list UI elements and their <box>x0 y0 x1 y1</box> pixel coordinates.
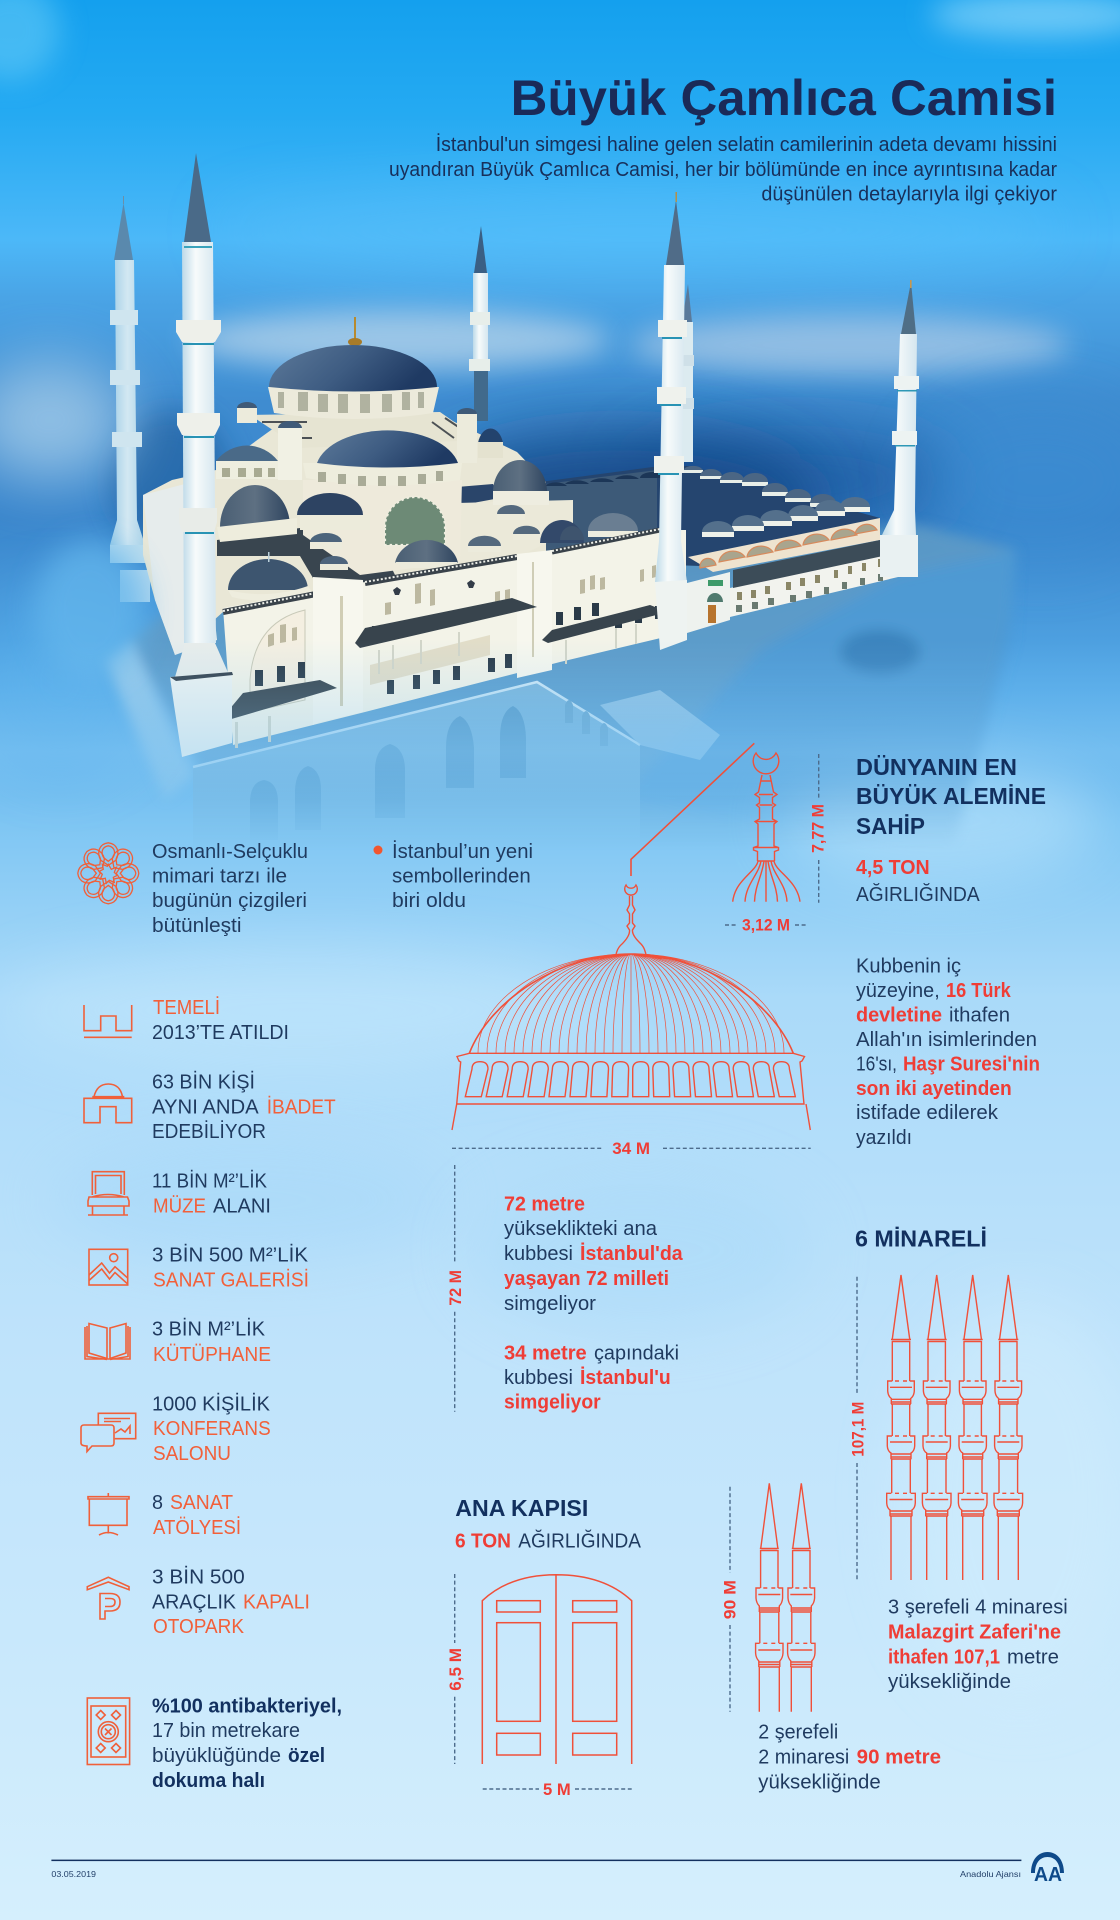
dimension: 34 M: 34 M <box>612 1140 650 1158</box>
text: müze: ALANI <box>213 1196 271 1218</box>
logo: Anadolu Ajansı: AA <box>1034 1864 1062 1886</box>
text: konferans salonu <box>152 1392 271 1465</box>
text: 72 metre <box>504 1194 684 1315</box>
text: 72 metre: kubbesi <box>504 1243 573 1265</box>
text: 6 ton: 6 TON <box>455 1531 511 1553</box>
footer date: 03.05.2019 <box>51 1869 96 1879</box>
plaza and retaining wall <box>105 525 1016 870</box>
text: carpet: dokuma halı <box>152 1770 265 1792</box>
text: 34 metre: kubbesi <box>504 1367 573 1389</box>
dome outline <box>469 954 793 1053</box>
text: dome interior: ithafen <box>949 1005 1010 1027</box>
diagram: door <box>482 1575 632 1764</box>
text: kütüphane: KÜTÜPHANE <box>153 1344 271 1366</box>
second large dome with drum and lattice arch <box>303 430 462 575</box>
text: sanat galerisi: SANAT GALERİSİ <box>153 1269 309 1292</box>
text: 72 metre: yaşayan 72 milleti <box>504 1268 669 1290</box>
text: Osmanlı-Selçuklu: bütünleşti <box>152 915 242 937</box>
text: sanat atölyesi: 8 <box>152 1492 163 1514</box>
icon: covered parking <box>87 1577 129 1619</box>
text: İstanbul'un yeni sembollerinden: sembollerinden <box>392 866 531 888</box>
text: 4,5 ton <box>856 857 980 906</box>
text: dome interior: 16 Türk <box>946 980 1011 1002</box>
intro paragraph: düşünülen detaylarıyla ilgi çekiyor <box>761 184 1057 206</box>
icon: gallery picture <box>89 1249 128 1285</box>
icon: carpet <box>87 1698 130 1764</box>
front facade <box>223 529 686 748</box>
text: 6 ton: AĞIRLIĞINDA <box>518 1530 642 1553</box>
text: 63 bin kişi <box>152 1071 336 1143</box>
text: dome interior <box>856 955 1040 1149</box>
text: 72 metre: simgeliyor <box>504 1293 596 1315</box>
dimension: 6,5 M: 6,5 M <box>447 1648 465 1691</box>
photo: Büyük Çamlıca mosque <box>0 153 1120 870</box>
icon: museum <box>88 1172 129 1215</box>
courtyard arcade and portico <box>687 497 915 633</box>
text: Osmanlı-Selçuklu: Osmanlı-Selçuklu <box>152 841 308 863</box>
heading: largest finial: DÜNYANIN EN <box>856 754 1017 780</box>
text: 2 minarets: 90 metre <box>857 1746 941 1768</box>
text: sanat atölyesi: SANAT <box>170 1492 233 1514</box>
text: sanat galerisi <box>152 1244 309 1292</box>
minaret: far left <box>110 196 150 602</box>
minaret: behind right <box>680 284 694 462</box>
arches <box>250 610 305 712</box>
text: sanat galerisi: 3 BİN 500 M²’LİK <box>152 1244 309 1267</box>
text: 34 metre: İstanbul'u <box>580 1366 671 1389</box>
tower blocks <box>313 577 363 725</box>
minaret: far right <box>880 280 919 577</box>
small front domes <box>228 505 638 601</box>
text: carpet: %100 antibakteriyel, <box>152 1696 342 1718</box>
text: kütüphane: 3 BİN M²’LİK <box>152 1318 266 1341</box>
text: kütüphane <box>152 1318 271 1366</box>
text: dome interior: son iki ayetinden <box>856 1078 1012 1100</box>
text: müze: 11 BİN M²’LİK <box>152 1170 268 1193</box>
dark roof terraces <box>217 528 395 583</box>
icon: conference <box>81 1413 136 1452</box>
text: dome interior: Kubbenin iç <box>856 955 961 977</box>
text: Osmanlı-Selçuklu <box>152 841 308 937</box>
text: 34 metre: 34 metre <box>504 1342 587 1364</box>
minaret: near left <box>170 153 233 757</box>
text: dome interior: Allah'ın isimlerinden <box>856 1029 1037 1051</box>
text: 4 minarets: ithafen 107,1 <box>888 1646 1000 1668</box>
text: dome interior: yazıldı <box>856 1127 912 1149</box>
stepped terraces under main dome <box>250 412 480 448</box>
text: 63 bin kişi: AYNI ANDA <box>152 1097 259 1119</box>
text: 2 minarets <box>758 1721 941 1793</box>
text: temeli: TEMELİ <box>153 996 220 1019</box>
diagram: main dome <box>452 885 810 1130</box>
heading: 6 minareli: 6 MİNARELİ <box>855 1226 987 1252</box>
text: 4 minarets: 3 şerefeli 4 minaresi <box>888 1597 1068 1619</box>
dark dome behind right <box>478 428 503 443</box>
text: konferans salonu: 1000 KİŞİLİK <box>152 1392 271 1415</box>
text: dome interior: devletine <box>856 1005 942 1027</box>
text: 63 bin kişi: EDEBİLİYOR <box>152 1120 266 1143</box>
text: 34 metre: çapındaki <box>594 1342 679 1364</box>
heading: largest finial: BÜYÜK ALEMİNE <box>856 783 1046 809</box>
ribbed domes <box>217 460 549 542</box>
text: 2 minarets: yüksekliğinde <box>758 1771 881 1793</box>
text: konferans salonu: KONFERANS <box>153 1418 271 1440</box>
text: temeli <box>152 996 289 1044</box>
text: kapalı otopark: OTOPARK <box>153 1616 245 1638</box>
text: kapalı otopark: ARAÇLIK <box>152 1592 237 1614</box>
body walls <box>143 412 573 655</box>
text: Osmanlı-Selçuklu: mimari tarzı ile <box>152 866 287 888</box>
text: 4 minarets: metre <box>1007 1646 1059 1668</box>
text: 4 minarets <box>888 1597 1068 1693</box>
text: 63 bin kişi: İBADET <box>267 1096 336 1119</box>
dimension: 5 M: 5 M <box>543 1781 571 1799</box>
text: dome interior: istifade edilerek <box>856 1102 999 1124</box>
dimension: 3,12 M <box>725 916 808 934</box>
title: Büyük Çamlıca Camisi <box>511 70 1057 126</box>
text: 4,5 ton: 4,5 TON <box>856 857 930 879</box>
courtyard and far wall <box>540 466 880 566</box>
text: konferans salonu: SALONU <box>153 1443 231 1465</box>
text: müze <box>152 1170 271 1218</box>
text: dome interior: Haşr Suresi'nin <box>903 1053 1040 1075</box>
text: 4 minarets: yüksekliğinde <box>888 1671 1011 1693</box>
dimension: 72 M: 72 M <box>447 1270 465 1306</box>
text: İstanbul'un yeni sembollerinden: biri oldu <box>392 890 466 912</box>
heading: largest finial <box>856 754 1046 839</box>
dimension: 90 M: 90 M <box>722 1580 740 1619</box>
leader line from dome to finial <box>631 743 754 876</box>
text: carpet: büyüklüğünde <box>152 1745 281 1767</box>
intro paragraph <box>389 133 1057 206</box>
intro paragraph: uyandıran Büyük Çamlıca Camisi, her bir bölümünde en ince ayrıntısına kadar <box>389 159 1057 181</box>
text: kapalı otopark: KAPALI <box>243 1592 310 1614</box>
dimension: 107,1 M: 107,1 M <box>850 1402 868 1457</box>
text: 72 metre: yükseklikteki ana <box>504 1218 658 1240</box>
text: 2 minarets: 2 minaresi <box>758 1746 849 1768</box>
text: carpet: 17 bin metrekare <box>152 1720 300 1742</box>
canopies <box>355 598 537 648</box>
small finial <box>616 885 646 954</box>
text: sanat atölyesi: ATÖLYESİ <box>153 1516 241 1539</box>
text: 72 metre: İstanbul'da <box>580 1242 684 1265</box>
dimension: 3,12 M: 3,12 M <box>742 916 790 934</box>
diagram: two minarets <box>756 1483 815 1712</box>
text: 4 minarets: Malazgirt Zaferi'ne <box>888 1622 1061 1644</box>
text: dome interior: yüzeyine, <box>856 980 940 1002</box>
text: İstanbul'un yeni sembollerinden <box>374 840 533 912</box>
text: 34 metre <box>504 1342 679 1413</box>
footer credit: Anadolu Ajansı <box>960 1869 1021 1879</box>
text: temeli: 2013’TE ATILDI <box>152 1022 289 1044</box>
diagram: large finial <box>733 753 800 902</box>
text: carpet <box>152 1696 342 1792</box>
footer rule <box>51 1860 1021 1861</box>
drum with windows <box>452 1053 810 1130</box>
logo: Anadolu Ajansı <box>1031 1852 1064 1886</box>
text: kapalı otopark <box>152 1566 310 1638</box>
icon: rosette <box>78 843 139 904</box>
text: dome interior: 16'sı, <box>856 1053 897 1075</box>
icon: projection screen <box>88 1493 129 1535</box>
text: kapalı otopark: 3 BİN 500 <box>152 1566 245 1589</box>
side half dome and towers <box>216 402 477 480</box>
text: 63 bin kişi: 63 BİN KİŞİ <box>152 1071 255 1094</box>
text: Osmanlı-Selçuklu: bugünün çizgileri <box>152 890 307 912</box>
heading: main door: ANA KAPISI <box>455 1495 588 1521</box>
icon: open book <box>85 1324 130 1360</box>
text: 6 ton <box>455 1530 642 1553</box>
dimension: 7,77 M: 7,77 M <box>810 804 828 853</box>
text: 2 minarets: 2 şerefeli <box>758 1721 838 1743</box>
text: carpet: özel <box>288 1745 325 1767</box>
text: 4,5 ton: AĞIRLIĞINDA <box>856 883 980 906</box>
icon: foundation <box>84 1005 132 1037</box>
text: İstanbul'un yeni sembollerinden: İstanbul’un yeni <box>392 840 533 863</box>
text: 72 metre: 72 metre <box>504 1194 585 1216</box>
heading: largest finial: SAHİP <box>856 813 925 839</box>
intro paragraph: İstanbul'un simgesi haline gelen selatin camilerinin adeta devamı hissini <box>436 133 1057 156</box>
diagram: four minarets <box>887 1275 1023 1580</box>
minaret: back centre <box>469 226 490 421</box>
text: sanat atölyesi <box>152 1492 241 1539</box>
text: müze: MÜZE <box>153 1196 206 1218</box>
main dome <box>268 317 439 419</box>
icon: worship hall <box>84 1084 132 1123</box>
text: 34 metre: simgeliyor <box>504 1391 601 1413</box>
minaret: right front <box>654 192 687 650</box>
